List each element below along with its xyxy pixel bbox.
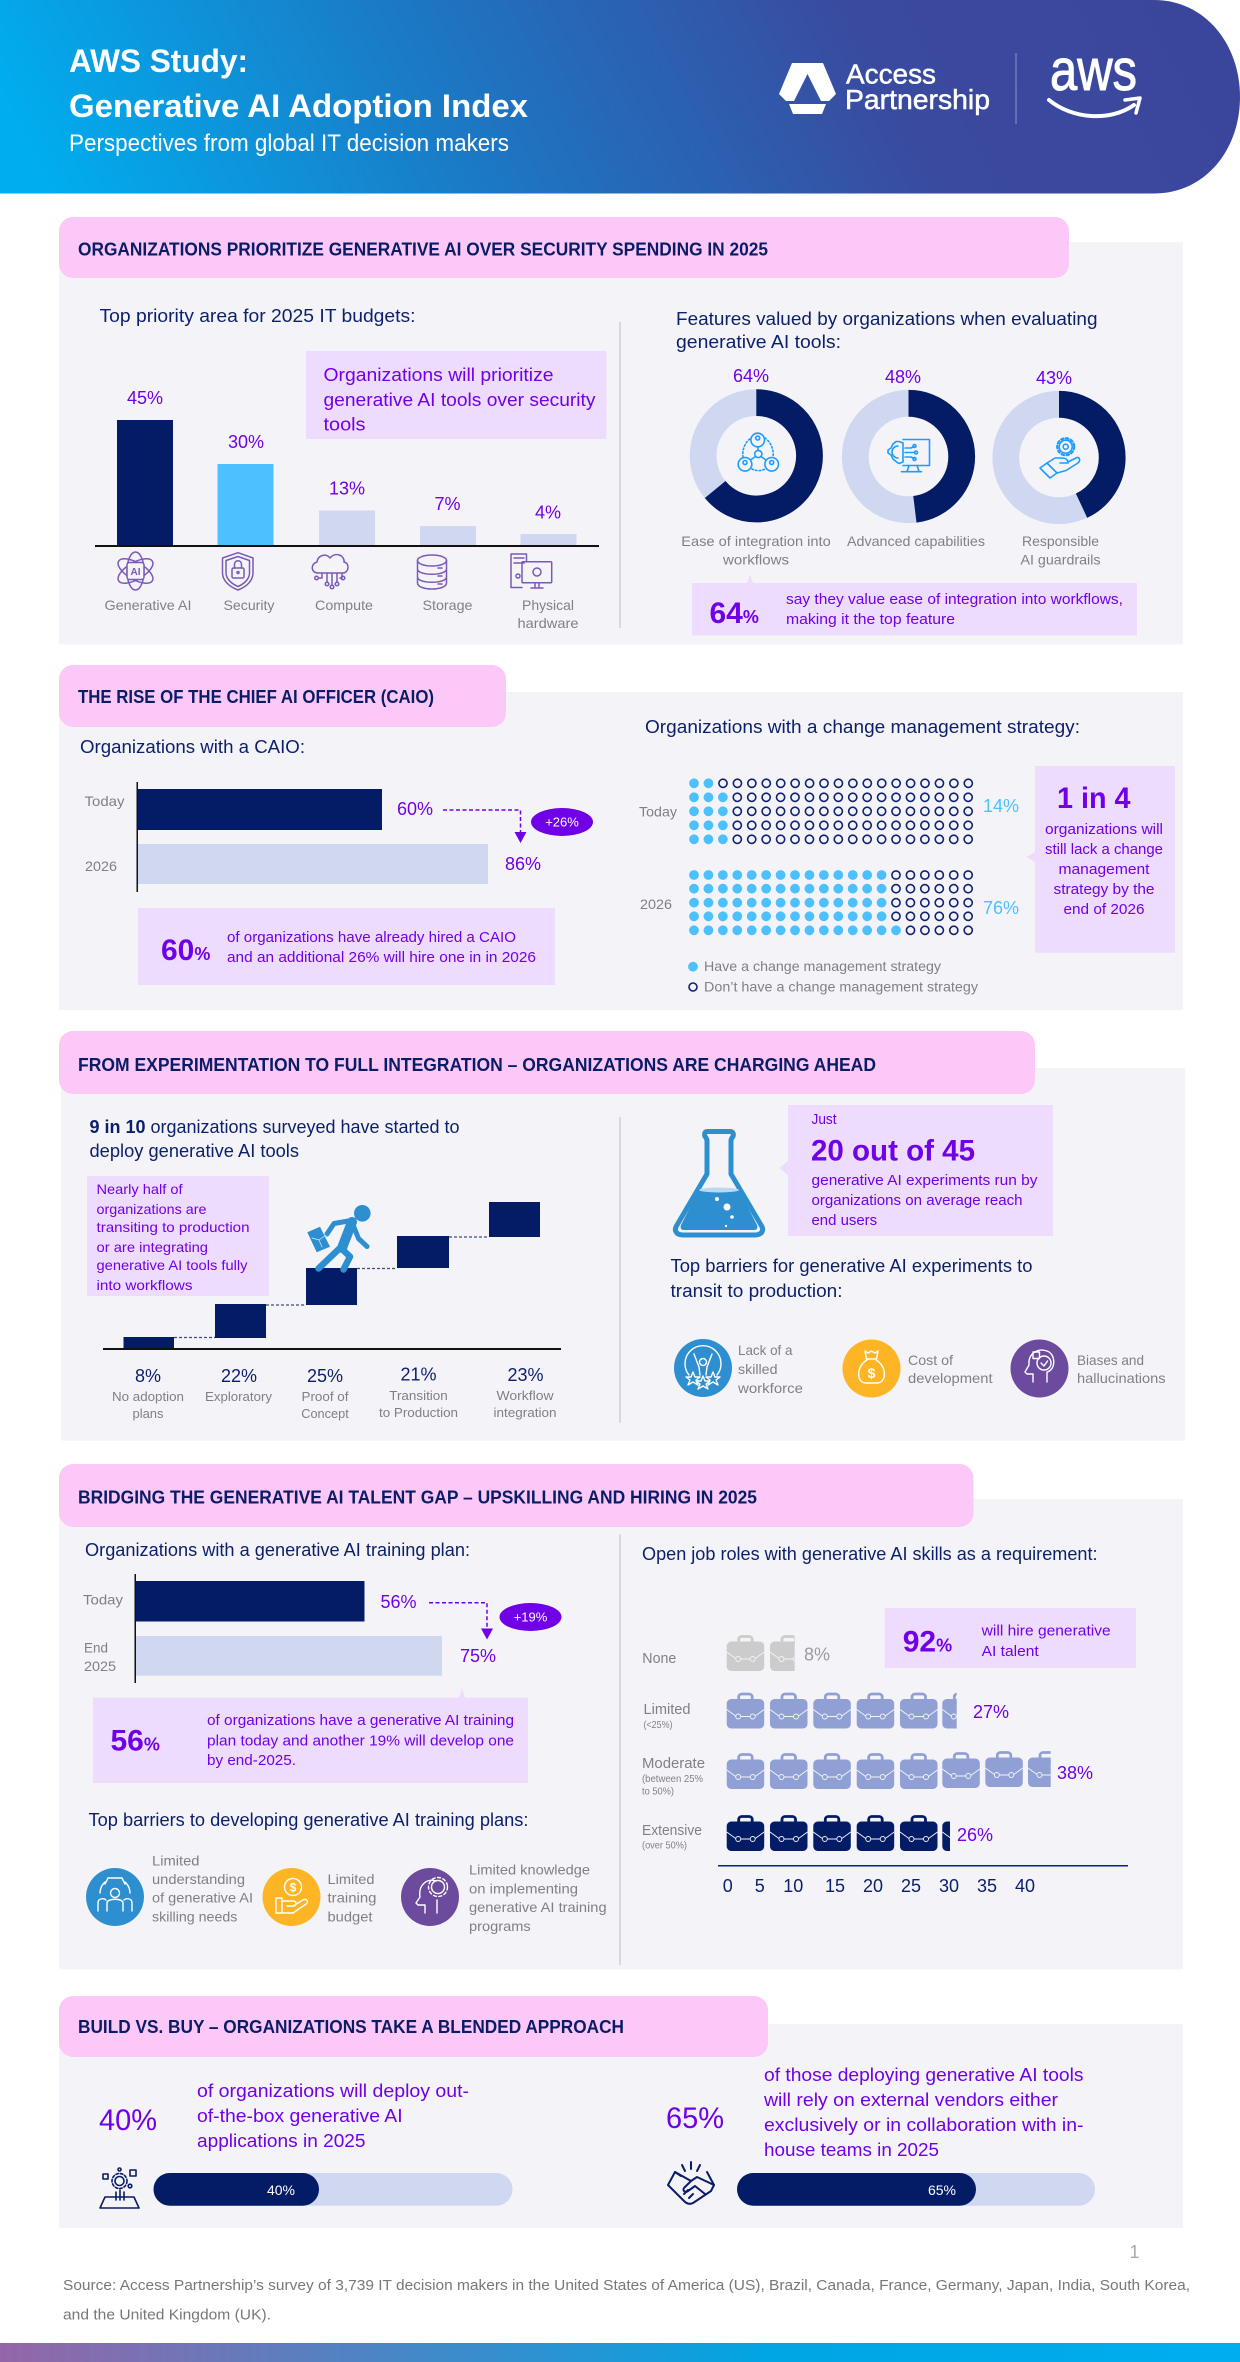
pictogram row: moderate [642,1752,1093,1798]
barrier: biases [1010,1340,1166,1398]
icon: compute [312,555,348,589]
barrier: knowledge: Limited knowledge [469,1862,590,1878]
callout: 20 out of 45 [779,1105,1053,1236]
callout: 60%: 60% [161,934,210,967]
callout: 64%: say they value ease of integration into workflows, [786,591,1123,608]
step labels: plans [132,1406,164,1421]
section heading [59,1464,974,1527]
donut captions [681,533,1100,568]
pictogram row: moderate: (between 25% [642,1773,703,1785]
badge: +19% [500,1603,562,1631]
callout: 56%: of organizations have a generative AI training [207,1712,514,1729]
progress bar: 40%: 40% [267,2182,295,2198]
callout: nearly half: into workflows [96,1277,192,1293]
donut chart: advanced capabilities 48% [855,367,962,510]
step labels: Proof of [302,1389,349,1404]
step labels: 23% [507,1365,544,1385]
callout: 56%: plan today and another 19% will develop one [207,1732,514,1750]
section 3: experimentation to integration [59,1031,1185,1441]
dot matrix: today [694,783,969,839]
panel background [59,692,1183,1010]
badge: +26% [531,808,593,836]
pictogram row: extensive: Extensive [642,1822,702,1839]
step labels [112,1365,556,1421]
barrier: cost [842,1340,993,1398]
callout: 20 out of 45: organizations on average reach [812,1192,1022,1209]
section heading: BRIDGING THE GENERATIVE AI TALENT GAP – UPSKILLING AND HIRING IN 2025 [78,1488,757,1508]
pictogram axis: 5 [755,1876,765,1896]
barrier: knowledge: generative AI training [469,1899,607,1915]
badge: +26%: +26% [545,814,579,830]
barrier: budget [262,1868,376,1926]
subtitle: Perspectives from global IT decision makers [69,130,509,157]
callout: 20 out of 45: 20 out of 45 [811,1135,975,1168]
step labels: Exploratory [205,1389,273,1404]
category labels: Storage [422,597,473,613]
progress bar: 40% [154,2173,512,2206]
chart title: CAIO: Organizations with a CAIO: [80,737,305,757]
section heading [59,665,506,727]
stat: 65%: of those deploying generative AI tools [764,2065,1084,2085]
arrow: CAIO growth [443,810,526,843]
bar chart: CAIO [84,782,541,892]
pictogram row: extensive: (over 50%) [642,1840,687,1852]
barrier: skilled workforce: workforce [737,1380,803,1396]
category labels: Compute [315,597,373,613]
callout: nearly half: or are integrating [96,1239,208,1255]
section heading: THE RISE OF THE CHIEF AI OFFICER (CAIO) [78,687,434,707]
step labels: integration [494,1405,556,1420]
section 1: prioritize generative AI [59,217,1183,644]
logo: Access Partnership [779,58,990,115]
callout: 64% [692,574,1137,636]
bar chart: training plan: 56% [380,1592,417,1612]
stat: 40%: 40% [99,2104,157,2137]
barrier: biases: Biases and [1077,1352,1144,1368]
callout: prioritize: tools [324,414,366,434]
section heading: ORGANIZATIONS PRIORITIZE GENERATIVE AI OVER SECURITY SPENDING IN 2025 [78,240,768,260]
pictogram row: limited: Limited [644,1701,690,1718]
pictogram axis: 10 [783,1876,803,1896]
badge: +19%: +19% [514,1610,548,1624]
barrier: understanding [86,1852,253,1926]
bar chart: CAIO: 2026 [85,858,117,874]
pictogram axis: 35 [977,1876,997,1896]
barrier: knowledge: on implementing [469,1880,578,1896]
bar chart: CAIO: 86% [505,854,541,874]
barriers title: Top barriers for generative AI experiments to [670,1256,1032,1276]
icon: integration [738,433,778,471]
section heading: FROM EXPERIMENTATION TO FULL INTEGRATION – ORGANIZATIONS ARE CHARGING AHEAD [78,1055,876,1075]
icon: out-of-the-box [100,2168,139,2208]
bar chart: budgets: 4% [535,502,561,522]
bar chart: training plan: End [84,1640,108,1656]
step labels: 22% [221,1366,257,1386]
legend: Have a change management strategy [704,958,941,974]
panel background [59,1499,1183,1970]
stat: 40% [99,2081,469,2151]
chart title: training plan: Organizations with a generative AI training plan: [85,1540,470,1560]
chart title: features: Features valued by organizations when evaluating [676,309,1098,329]
footer band [0,2343,1240,2362]
pictogram axis [718,1865,1128,1896]
pictogram axis: 40 [1015,1876,1035,1896]
bar chart: budgets: 7% [434,494,461,514]
callout: prioritize: generative AI tools over security [324,390,596,410]
step labels: to Production [379,1405,458,1420]
callout: nearly half: generative AI tools fully [96,1257,248,1273]
dot matrix labels: 2026 [640,896,672,912]
step labels: 8% [135,1366,161,1386]
callout: prioritize: Organizations will prioritize [324,365,554,385]
progress bar: 65% [737,2173,1095,2206]
step labels: Workflow [496,1388,554,1403]
stat: 65%: house teams in 2025 [764,2140,939,2160]
donut chart: responsible AI guardrails 43%: 43% [1036,368,1072,388]
callout: nearly half: organizations are [96,1201,207,1217]
barrier: knowledge: programs [469,1918,531,1934]
callout: 60% [138,908,555,985]
step labels: No adoption [112,1389,184,1404]
icon: capabilities [888,440,930,472]
logo: Access Partnership: Access [846,58,936,90]
donut chart: advanced capabilities 48%: 48% [885,367,921,387]
callout: 1 in 4: management [1058,861,1150,878]
logo: aws: aws [1050,38,1137,103]
chart title: features: generative AI tools: [676,332,841,352]
callout: 92% [885,1608,1136,1668]
chart title: 9 in 10 [90,1117,460,1161]
pictogram row: none: 8% [804,1645,830,1665]
pictogram row: moderate: 38% [1057,1763,1093,1783]
callout: 92%: 92% [903,1626,952,1659]
title [69,43,528,124]
step labels: 25% [307,1366,343,1386]
section heading [59,1996,768,2057]
page number: 1 [1129,2242,1140,2262]
progress bar: 65%: 65% [928,2182,956,2198]
category labels: Security [224,597,274,613]
callout: 1 in 4: organizations will [1045,821,1163,838]
callout: prioritize [306,351,606,439]
stat: 40%: of organizations will deploy out- [197,2081,469,2101]
dot matrix labels: 76% [983,898,1019,918]
barrier: budget: training [328,1890,376,1906]
pictogram axis: 15 [825,1876,845,1896]
section heading [59,1031,1035,1094]
icon: flask [675,1132,763,1235]
callout: 64%: making it the top feature [786,611,955,628]
section heading: BUILD VS. BUY – ORGANIZATIONS TAKE A BLENDED APPROACH [78,2017,624,2037]
callout: 56%: by end-2025. [207,1752,296,1769]
category labels: hardware [518,615,579,631]
pictogram row: none [642,1636,830,1671]
barrier: cost: Cost of [908,1352,953,1368]
callout: 1 in 4: 1 in 4 [1057,782,1131,815]
callout: 92%: AI talent [982,1643,1040,1660]
step labels: Transition [389,1388,448,1403]
pictogram row: moderate: to 50%) [642,1786,674,1798]
donut captions: AI guardrails [1020,552,1100,568]
source note: Source: Access Partnership’s survey of 3,739 IT decision makers in the United States of America (US), Brazil, Canada, France, Germany, Japan, India, South Korea, [63,2277,1190,2294]
section 4: talent gap [59,1464,1183,1970]
bar chart: budgets [95,388,599,547]
callout: nearly half [87,1176,269,1296]
bar chart: training plan: 75% [460,1646,496,1666]
bar chart: CAIO: 60% [397,799,433,819]
barrier: budget: $ [290,1880,297,1894]
source note: and the United Kingdom (UK). [63,2306,271,2323]
staircase chart [103,1202,561,1350]
donut captions: workflows [722,552,789,568]
panel background [61,1068,1185,1441]
source note [63,2277,1190,2323]
barrier: knowledge [401,1862,607,1934]
barrier: biases: hallucinations [1077,1370,1166,1386]
chart title: change management: Organizations with a change management strategy: [645,717,1080,737]
barriers title: Top barriers to developing generative AI training plans: [88,1810,528,1830]
stat: 40%: applications in 2025 [197,2131,366,2151]
bar chart: budgets: 13% [329,478,365,498]
barrier: cost: $ [868,1365,876,1381]
icon: handshake [668,2162,714,2204]
banner background [0,0,1240,194]
stat: 65% [666,2065,1084,2160]
bar chart: training plan [83,1574,496,1683]
section heading [59,217,1069,278]
bar chart: CAIO: Today [84,793,124,809]
barrier: skilled workforce: Lack of a [738,1342,793,1358]
dot matrix labels [639,796,1019,918]
icon: runner [307,1205,371,1270]
callout: 1 in 4: end of 2026 [1064,901,1144,918]
icon: responsible AI [1040,438,1080,478]
step labels: Concept [301,1406,349,1421]
title: Generative AI Adoption Index [69,88,528,124]
title: AWS Study: [69,43,248,79]
chart title: 9 in 10: 9 in 10 organizations surveyed have started to [90,1117,460,1137]
callout: 56% [93,1688,528,1783]
category labels [104,597,579,631]
panel background [59,242,1183,644]
pictogram axis: 20 [863,1876,883,1896]
dot matrix labels: Today [639,804,677,820]
dot matrix labels: 14% [983,796,1019,816]
barrier: understanding: skilling needs [152,1908,237,1924]
bar chart: budgets: 30% [228,432,264,452]
chart title: features [676,309,1098,352]
chart title: 9 in 10: deploy generative AI tools [90,1141,299,1161]
pictogram row: limited [644,1694,1009,1731]
pictogram axis: 0 [723,1876,733,1896]
icon: security [222,553,253,590]
callout: nearly half: Nearly half of [96,1181,183,1197]
arrow: training growth [429,1603,493,1640]
callout: 1 in 4: strategy by the [1054,881,1154,898]
stat: 65%: will rely on external vendors either [763,2090,1058,2110]
bar chart: budgets: 45% [127,388,163,408]
pictogram row: limited: (<25%) [644,1719,672,1731]
donut chart: responsible AI guardrails 43% [1006,368,1112,511]
donut captions: Responsible [1022,533,1099,549]
barrier: understanding: of generative AI [152,1890,253,1906]
barrier: understanding: understanding [152,1871,245,1887]
callout: 20 out of 45: Just [812,1111,837,1128]
legend: Don’t have a change management strategy [704,979,978,995]
bar chart: training plan: 2025 [84,1658,116,1674]
barrier: understanding: Limited [152,1852,200,1868]
barrier: skilled workforce: skilled [738,1361,778,1377]
stat: 65%: exclusively or in collaboration with in- [764,2115,1084,2135]
pictogram axis: 30 [939,1876,959,1896]
donut captions: Advanced capabilities [847,533,985,549]
chart title: job roles: Open job roles with generative AI skills as a requirement: [642,1544,1098,1564]
donut chart: ease of integration 64%: 64% [733,366,769,386]
pictogram row: extensive: 26% [957,1825,993,1845]
callout: 20 out of 45: generative AI experiments run by [812,1172,1038,1189]
legend [688,958,978,995]
callout: 60%: of organizations have already hired a CAIO [227,929,516,946]
bar chart: training plan: Today [83,1592,123,1608]
pictogram axis: 25 [901,1876,921,1896]
category labels: Generative AI [104,597,192,613]
stat: 65%: 65% [666,2102,724,2135]
barrier: budget: budget [328,1908,373,1924]
category labels: Physical [522,597,574,613]
pictogram row: none: None [642,1650,676,1667]
callout: 1 in 4 [1026,766,1175,953]
barrier: cost: development [908,1370,993,1386]
stat: 40%: of-the-box generative AI [197,2106,403,2126]
callout: nearly half: transiting to production [96,1219,250,1235]
header banner [0,0,1240,194]
pictogram row: moderate: Moderate [642,1755,705,1772]
barriers title [670,1256,1032,1301]
chart title: budgets: Top priority area for 2025 IT budgets: [100,306,416,326]
icon: generative AI: AI [130,567,141,578]
step labels: 21% [400,1365,437,1385]
pictogram row: limited: 27% [973,1702,1009,1722]
icon: storage [418,555,446,589]
callout: 20 out of 45: end users [812,1212,877,1229]
callout: 92%: will hire generative [981,1623,1111,1640]
callout: 56%: 56% [110,1725,160,1758]
callout: 64%: 64% [710,597,759,630]
donut chart: ease of integration 64% [703,366,810,509]
barrier: budget: Limited [328,1871,374,1887]
icon: generative AI [114,552,157,590]
pictogram row: extensive [642,1816,993,1852]
section 2: chief AI officer [59,665,1183,1010]
barrier: skilled workforce [674,1339,803,1397]
dot matrix: 2026 [694,875,969,930]
donut captions: Ease of integration into [681,533,831,549]
section 5: build vs buy [59,1996,1183,2228]
callout: 60%: and an additional 26% will hire one in in 2026 [227,949,536,966]
logo: Access Partnership: Partnership [845,84,990,115]
icon: physical hardware [511,554,552,588]
callout: 1 in 4: still lack a change [1045,841,1163,858]
barriers title: transit to production: [670,1281,842,1301]
panel background [59,2024,1183,2228]
